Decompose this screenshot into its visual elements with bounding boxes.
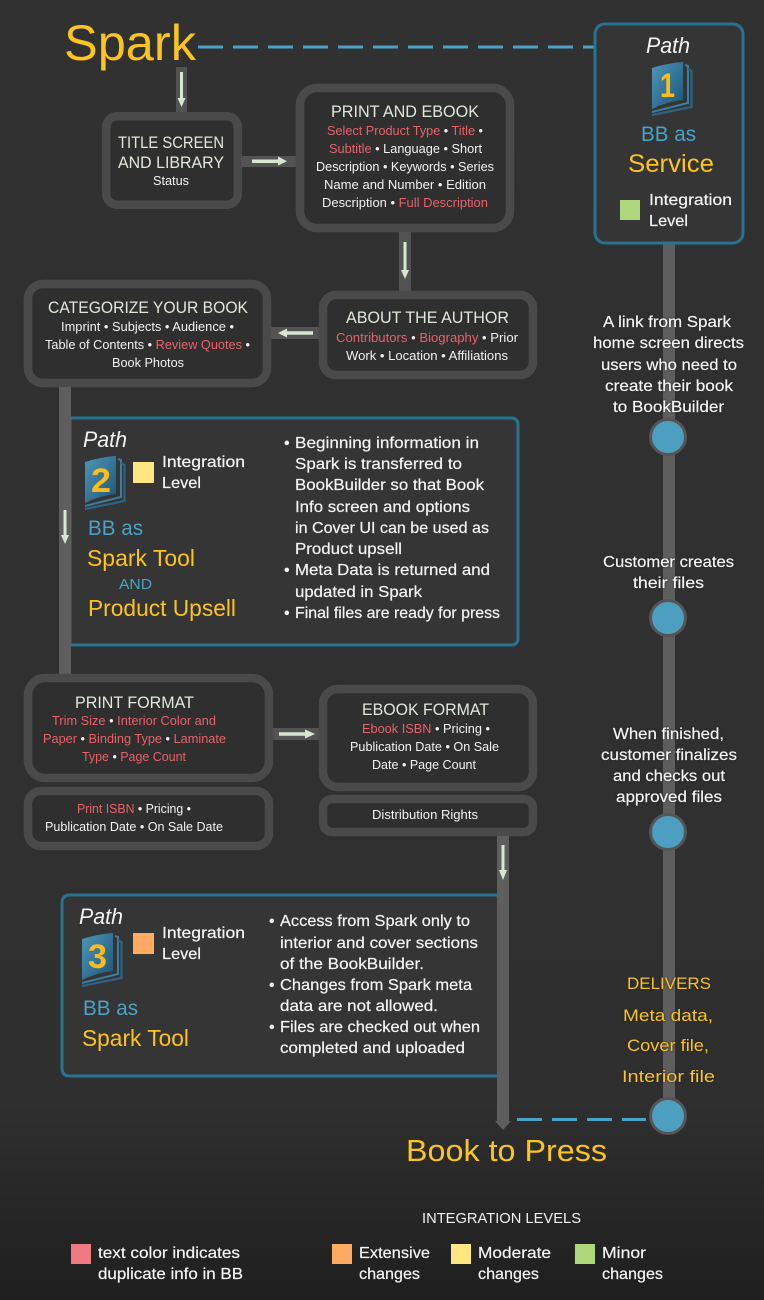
timeline text: delivers: Interior file [622,1067,715,1086]
icon: book 2: 2 [91,462,111,500]
path 3 description: interior and cover sections [280,935,478,952]
timeline text: step 2: Customer creates [603,554,734,571]
path 2 label: Path [83,427,127,452]
panel: ebook format: Publication Date • On Sale [350,739,499,754]
dashed line: Spark to Path 1 [198,46,595,48]
path 3 name: BB as [83,997,138,1020]
path 2 name [87,517,236,621]
timeline text: step 3: approved files [616,789,722,806]
title: Spark: Spark [64,15,197,71]
panel: distribution rights [323,799,533,832]
timeline text: step 1: users who need to [601,357,737,374]
integration level: extensive [133,925,245,963]
timeline text: delivers [622,974,715,1086]
timeline node 3 [650,814,686,850]
panel: print and ebook: Name and Number • Edition [324,177,486,192]
icon: book 3: 3 [88,938,107,976]
timeline text: step 3: customer finalizes [601,747,737,764]
dashed line: node 4 to Book to Press [517,1118,646,1121]
legend: extensive: Extensive [359,1245,430,1262]
legend: extensive [332,1244,430,1283]
timeline text: step 3: When finished, [613,726,724,743]
path 3 description [269,913,480,1057]
panel: ebook format: EBOOK FORMAT [362,701,489,719]
panel: print format: Type • Page Count [82,749,186,764]
path 3 description: data are not allowed. [280,998,438,1015]
connector: print and ebook to author [399,232,411,291]
timeline text: step 1: create their book [605,378,734,395]
path 3 description: completed and uploaded [280,1040,465,1057]
connector: Spark to title screen [176,67,187,113]
panel: print and ebook: Select Product Type • Title • [327,123,483,138]
panel: title screen and library: TITLE SCREEN [118,134,224,152]
panel: about the author: Contributors • Biography • Prior [336,330,519,345]
panel: title screen and library [106,116,238,205]
path 3 name: Spark Tool [82,1025,189,1051]
panel: categorize your book: Book Photos [112,355,184,370]
path 3 description: Changes from Spark meta [280,977,472,994]
panel: about the author: Work • Location • Affiliations [346,348,508,363]
panel: print ISBN: Publication Date • On Sale Date [45,819,223,834]
path 1 name: Service [628,150,714,178]
timeline text: delivers: Meta data, [623,1006,713,1025]
panel: categorize your book: Table of Contents • Review Quotes • [45,337,250,352]
legend: moderate: changes [478,1266,539,1283]
timeline text: step 1: home screen directs [593,335,744,352]
timeline text: step 3: and checks out [613,768,726,785]
panel: print and ebook: Subtitle • Language • Short [329,141,482,156]
panel: categorize your book: Imprint • Subjects • Audience • [61,319,234,334]
connector: print to ebook [273,728,319,740]
timeline text: step 1: A link from Spark [603,314,732,331]
timeline node 1 [650,420,686,454]
legend: moderate: Moderate [478,1245,551,1262]
path 2 description: in Cover UI can be used as [295,520,489,537]
path 3 description: Files are checked out when [280,1019,480,1036]
legend: minor: changes [602,1266,663,1283]
legend: duplicate info: duplicate info in BB [98,1266,243,1283]
path 2 description: Final files are ready for press [295,605,500,622]
timeline node 2 [650,600,686,636]
path 3 label: Path [79,904,123,929]
timeline text: step 2: their files [633,575,704,592]
timeline text: step 3 [601,726,737,806]
integration level: moderate: Level [162,475,201,492]
path 2 name: BB as [88,517,143,540]
integration level: extensive: Level [162,946,201,963]
panel: print and ebook: Description • Keywords • Series [316,159,494,174]
panel: ebook format [323,689,533,787]
icon: book 1 [652,62,692,115]
path 3 description: of the BookBuilder. [280,956,424,973]
panel: path 2 [70,418,518,645]
path 2 description: Beginning information in [295,435,479,452]
legend: duplicate info: text color indicates [98,1245,240,1262]
path 1 label: Path [646,33,690,58]
timeline text: step 2 [603,554,734,592]
integration level: minor: Integration [649,192,732,209]
path 2 description: BookBuilder so that Book [295,477,485,494]
connector: author to categorize [271,327,319,339]
path 2 description: Spark is transferred to [295,456,462,473]
path 3 description: • [269,977,275,994]
path 2 name: Product Upsell [88,595,236,621]
panel: print format [28,678,269,778]
icon: book 2 [85,456,124,509]
panel: print ISBN: Print ISBN • Pricing • [77,801,191,816]
path 3 description: Access from Spark only to [280,913,470,930]
legend: extensive: changes [359,1266,420,1283]
right timeline connector [663,243,675,1116]
path 2 description: Meta Data is returned and [295,562,490,579]
panel: about the author: ABOUT THE AUTHOR [346,309,509,327]
panel: print and ebook: Description • Full Description [322,195,488,210]
panel: title screen and library: AND LIBRARY [118,154,224,172]
timeline text: step 1 [593,314,744,416]
panel: categorize your book: CATEGORIZE YOUR BOOK [48,299,248,317]
path 2 description: • [284,435,290,452]
timeline text: delivers: Cover file, [627,1036,709,1055]
panel: print format: Trim Size • Interior Color and [52,713,216,728]
path 2 description: updated in Spark [295,584,423,601]
panel: about the author [323,295,533,375]
panel: categorize your book [28,284,267,383]
path 2 description: Info screen and options [295,499,470,516]
timeline text: delivers: DELIVERS [627,974,711,993]
panel: print and ebook: PRINT AND EBOOK [331,103,479,121]
integration level: extensive: Integration [162,925,245,942]
path 2 name: AND [119,576,152,593]
icon: book 1: 1 [660,67,675,105]
panel: print format: Paper • Binding Type • Laminate [43,731,226,746]
connector: categorize to print format [59,387,71,675]
connector: distribution rights to Book to Press [495,836,511,1130]
panel: print ISBN [28,791,269,846]
path 2 description: Product upsell [295,541,402,558]
icon: book 3 [82,933,122,986]
path 3 description: • [269,1019,275,1036]
path 2 description: • [284,562,290,579]
panel: ebook format: Ebook ISBN • Pricing • [362,721,490,736]
connector: title screen to print and ebook [241,156,296,167]
panel: ebook format: Date • Page Count [372,757,476,772]
path 3 description: • [269,913,275,930]
path 2 name: Spark Tool [87,545,195,571]
legend: duplicate info [71,1244,243,1283]
Book to Press heading: Book to Press [406,1133,607,1168]
legend: minor: Minor [602,1245,647,1262]
panel: distribution rights: Distribution Rights [372,807,478,822]
legend: integration levels: INTEGRATION LEVELS [422,1210,581,1227]
legend: minor [575,1244,663,1283]
panel: path 1 [595,24,743,243]
panel: path 3 [62,895,498,1076]
path 3 name [82,997,189,1051]
integration level: minor [620,192,732,230]
path 1 name: BB as [641,123,696,146]
panel: print format: PRINT FORMAT [75,694,194,712]
path 2 description [284,435,500,622]
legend: moderate [451,1244,551,1283]
panel: print and ebook [300,88,510,228]
integration level: moderate: Integration [162,454,245,471]
legend: integration levels [71,1210,663,1283]
path 2 description: • [284,605,290,622]
integration level: moderate [133,454,245,492]
integration level: minor: Level [649,213,688,230]
timeline node 4 [650,1098,686,1134]
panel: title screen and library: Status [153,173,189,188]
timeline text: step 1: to BookBuilder [613,399,725,416]
path 1 name [628,123,714,178]
